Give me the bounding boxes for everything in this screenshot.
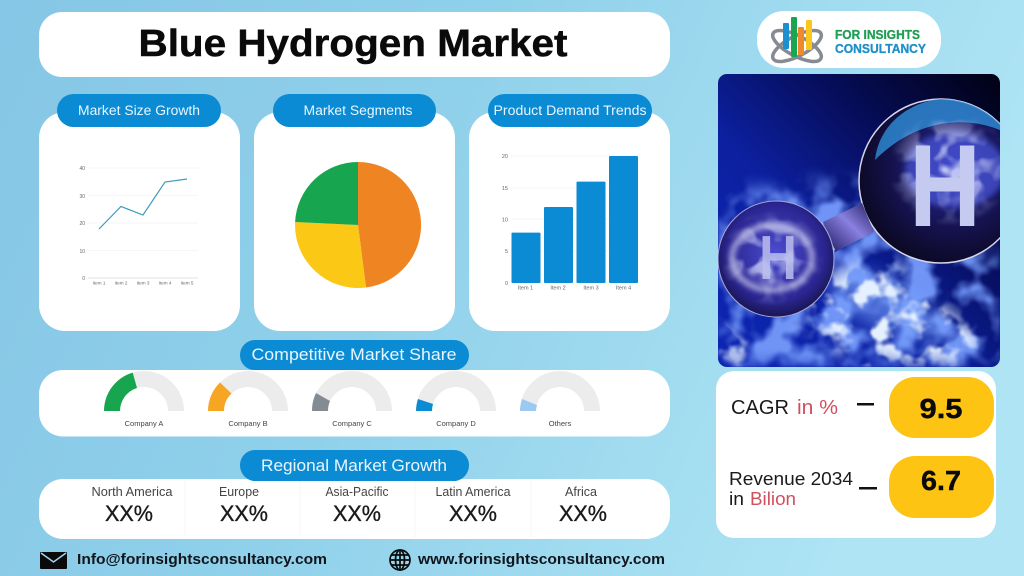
contact: website: www.forinsightsconsultancy.com: [417, 551, 665, 568]
gauge: company B: Company B: [228, 419, 268, 428]
logo panel: [757, 11, 941, 68]
panel: product demand trends: [469, 94, 670, 331]
image: hydrogen molecule: [718, 74, 1023, 367]
metric: revenue: [729, 456, 994, 518]
line chart: Item 1: [93, 280, 106, 286]
bar chart: Item 3: [583, 286, 599, 292]
line chart: 0: [82, 276, 85, 282]
logo text: FOR INSIGHTS: [835, 28, 920, 42]
panel: market size growth: [39, 94, 240, 331]
heading pill: [240, 340, 469, 370]
region: latin america: XX%: [449, 501, 497, 526]
region: africa: [559, 485, 607, 526]
icon: logo bars and orbit: [768, 17, 826, 68]
logo text: [835, 28, 927, 56]
big sphere: [858, 98, 1000, 264]
big sphere: H: [909, 121, 981, 252]
heading pill: Market Size Growth: [78, 103, 200, 118]
gauge: company B: [208, 371, 288, 428]
title panel: [39, 12, 670, 77]
heading pill: Competitive Market Share: [252, 346, 456, 364]
panel: market segments: [254, 94, 455, 331]
metric: revenue: Revenue 2034: [729, 469, 853, 489]
region: africa: Africa: [565, 485, 597, 499]
metric: CAGR: 9.5: [920, 393, 962, 424]
region: europe: Europe: [219, 485, 259, 499]
small sphere: [718, 200, 836, 318]
heading pill: [240, 450, 469, 481]
heading pill: [57, 94, 221, 127]
region: asia-pacific: Asia-Pacific: [326, 485, 388, 499]
heading pill: [488, 94, 652, 127]
panel: key metrics: [716, 371, 996, 538]
region: africa: XX%: [559, 501, 607, 526]
metric: CAGR: CAGR: [731, 397, 789, 419]
bar chart: 0: [505, 281, 508, 287]
metric: revenue: in: [729, 489, 744, 509]
pie chart: [295, 162, 421, 288]
panel: competitive market share: [39, 340, 670, 436]
heading pill: [273, 94, 436, 127]
title: Blue Hydrogen Market: [138, 23, 568, 65]
bar chart: Item 1: [518, 286, 533, 292]
panel: regional market growth: [39, 450, 670, 539]
region: north america: North America: [92, 485, 173, 499]
metric: revenue: Bilion: [750, 489, 796, 509]
line chart: Item 2: [115, 280, 128, 286]
heading pill: Market Segments: [304, 103, 413, 118]
region: north america: XX%: [105, 501, 153, 526]
region: europe: [219, 485, 268, 526]
line chart: Item 5: [181, 280, 194, 286]
line chart: 10: [79, 249, 85, 255]
metric: CAGR: in %: [797, 397, 838, 419]
bar chart: [502, 154, 638, 292]
bar chart: 15: [502, 186, 508, 192]
heading pill: Product Demand Trends: [494, 103, 647, 118]
small sphere: H: [759, 224, 797, 293]
gauge: company D: Company D: [436, 419, 476, 428]
gauge: others: Others: [549, 419, 571, 428]
metric: CAGR: [731, 377, 994, 438]
region: asia-pacific: XX%: [333, 501, 381, 526]
gauge: company C: Company C: [332, 419, 372, 428]
bar chart: 20: [502, 154, 508, 160]
gauge: company A: [104, 371, 184, 428]
bar chart: 10: [502, 218, 508, 224]
gauge: others: [520, 371, 600, 428]
metric: revenue: 6.7: [921, 465, 961, 496]
line chart: [79, 166, 198, 286]
line chart: 30: [79, 194, 85, 200]
line chart: Item 4: [159, 280, 172, 286]
heading pill: Regional Market Growth: [261, 457, 447, 475]
line chart: 20: [79, 221, 85, 227]
gauge: company D: [416, 371, 496, 428]
bar chart: 5: [505, 249, 508, 255]
region: latin america: Latin America: [436, 485, 511, 499]
line chart: Item 3: [137, 280, 150, 286]
gauge: company C: [312, 371, 392, 428]
logo text: CONSULTANCY: [835, 42, 927, 56]
line chart: 40: [79, 166, 85, 172]
icon: envelope: [40, 552, 67, 569]
region: europe: XX%: [220, 501, 268, 526]
icon: globe: [390, 550, 410, 570]
gauge: company A: Company A: [125, 419, 163, 428]
bar chart: Item 4: [616, 286, 631, 292]
region: latin america: [436, 485, 511, 526]
bar chart: Item 2: [550, 286, 566, 292]
region: asia-pacific: [326, 485, 388, 526]
contact: email: Info@forinsightsconsultancy.com: [77, 551, 327, 568]
region: north america: [92, 485, 173, 526]
bond: [823, 203, 874, 252]
